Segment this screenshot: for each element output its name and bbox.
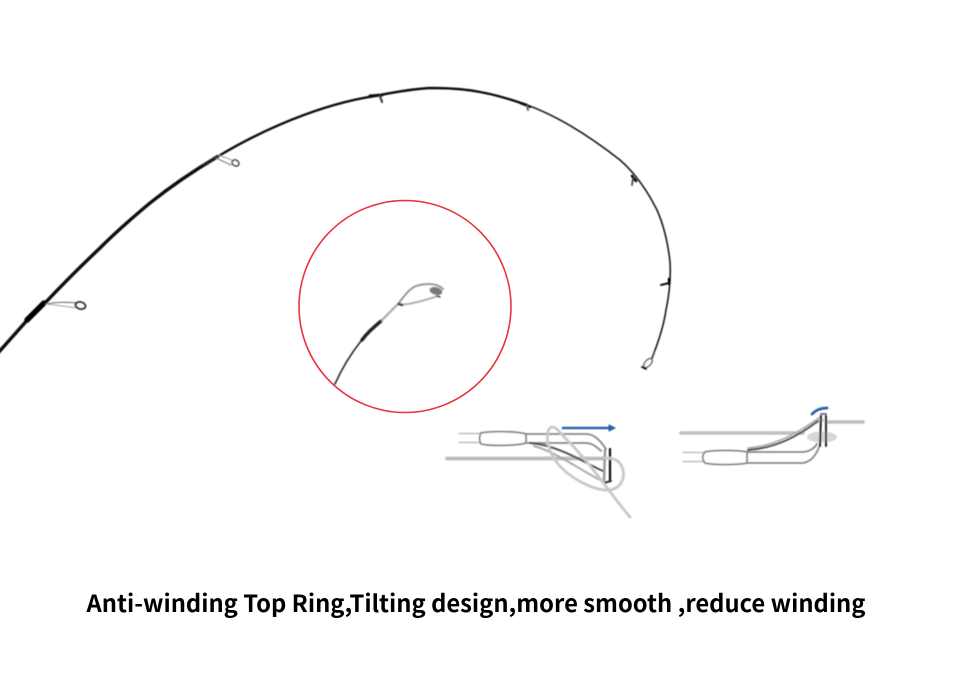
- guide ring 5: [632, 178, 633, 185]
- guide ring 3: [380, 96, 382, 102]
- guide ring 2: [216, 155, 240, 167]
- red zoom circle: [299, 200, 511, 412]
- fishing rod: [0, 88, 670, 369]
- arrow: blue pull direction: [563, 425, 615, 431]
- rod wraps: [27, 303, 44, 320]
- magnified top ring: [335, 284, 443, 384]
- diagram: line sliding off tilted guide: [681, 408, 863, 464]
- guide ring 1: [46, 301, 86, 310]
- guide ring 6: [661, 283, 669, 285]
- top ring: [642, 352, 655, 369]
- guide ring 4: [527, 106, 528, 110]
- arrow: blue curved motion: [812, 408, 827, 414]
- tangled loop: [547, 427, 630, 517]
- diagram: line tangled on guide: [447, 425, 630, 517]
- caption: Anti-winding Top Ring,Tilting design,more smooth ,reduce winding: [87, 584, 865, 619]
